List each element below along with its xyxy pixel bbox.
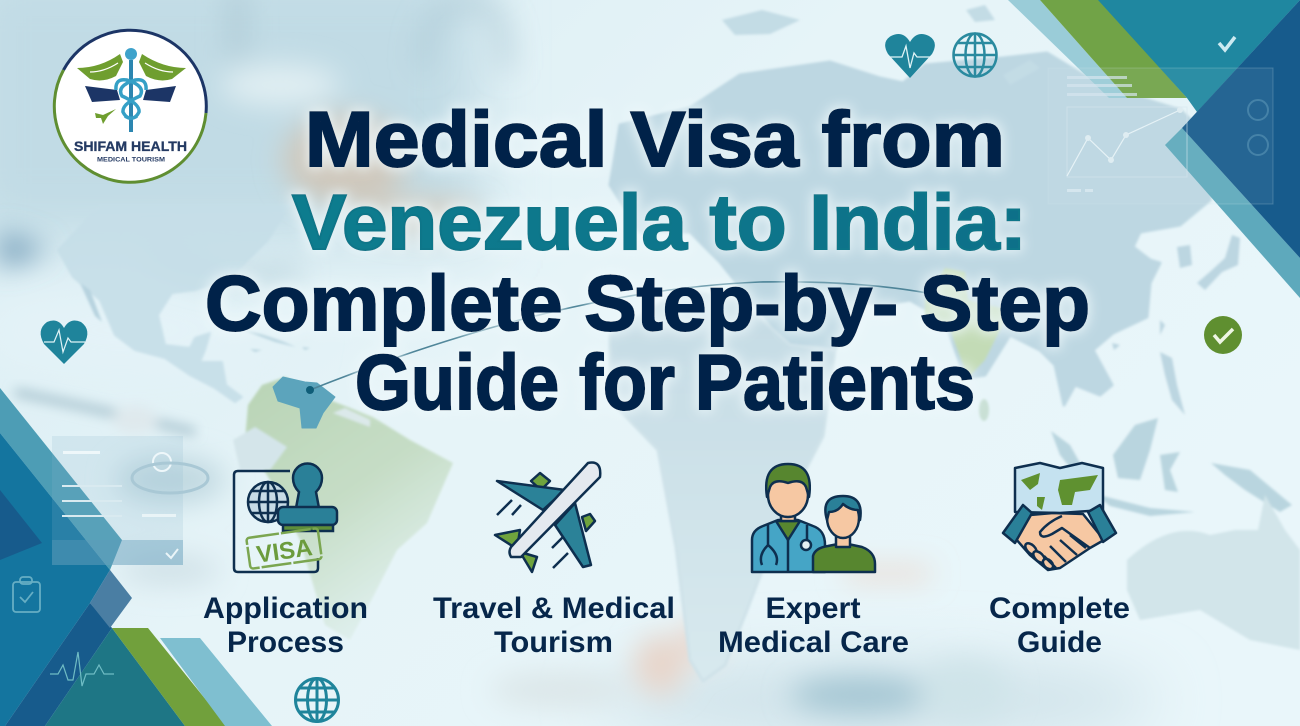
label: application process: Process (227, 626, 344, 659)
icon: globe bottom (296, 678, 338, 722)
title line 2: Venezuela to India: (292, 178, 1027, 266)
logo (54, 30, 206, 182)
stamp (278, 464, 337, 531)
logo plane wings (85, 86, 176, 102)
icon: pulse line (50, 652, 114, 686)
label: application process (203, 592, 368, 659)
icon: white check top right (1219, 37, 1235, 50)
icon: heart left (41, 320, 87, 364)
feature labels (203, 592, 1130, 659)
title line 3: Complete Step-by- Step (205, 259, 1090, 347)
label: complete guide (989, 592, 1130, 659)
title (205, 95, 1090, 426)
label: expert medical care (718, 592, 909, 659)
icon: doctor and patient (752, 464, 875, 572)
icon: airplane (495, 463, 600, 572)
title line 4: Guide for Patients (355, 338, 975, 426)
globe emblem (248, 482, 288, 522)
top right geometric shapes (1008, 0, 1300, 298)
logo small plane (95, 109, 116, 124)
label: complete guide: Complete (989, 592, 1130, 625)
icon: handshake with map (1003, 463, 1116, 571)
label: travel and medical tourism: Tourism (494, 626, 613, 659)
icon: globe top (954, 33, 997, 77)
bottom left dashboard panel (52, 436, 208, 565)
label: expert medical care: Medical Care (718, 626, 909, 659)
label: application process: Application (203, 592, 368, 625)
logo caduceus (116, 48, 146, 132)
label: travel and medical tourism (433, 592, 675, 659)
label: complete guide: Guide (1017, 626, 1102, 659)
top right chart panel (1048, 68, 1273, 204)
logo tagline: MEDICAL TOURISM (97, 158, 165, 164)
visa stamp mark: VISA (255, 534, 314, 569)
title line 1: Medical Visa from (305, 95, 1005, 183)
label: travel and medical tourism: Travel & Medical (433, 592, 675, 625)
label: expert medical care: Expert (766, 592, 861, 625)
icon: green check (1204, 316, 1242, 354)
icon: clipboard (13, 577, 40, 612)
icon: visa passport and stamp (234, 464, 337, 572)
icon: heart top (885, 34, 935, 78)
venezuela highlight and route (273, 282, 960, 428)
logo wings (77, 54, 186, 80)
logo wordmark: SHIFAM HEALTH (74, 139, 187, 154)
bottom left geometric shapes (0, 388, 272, 726)
